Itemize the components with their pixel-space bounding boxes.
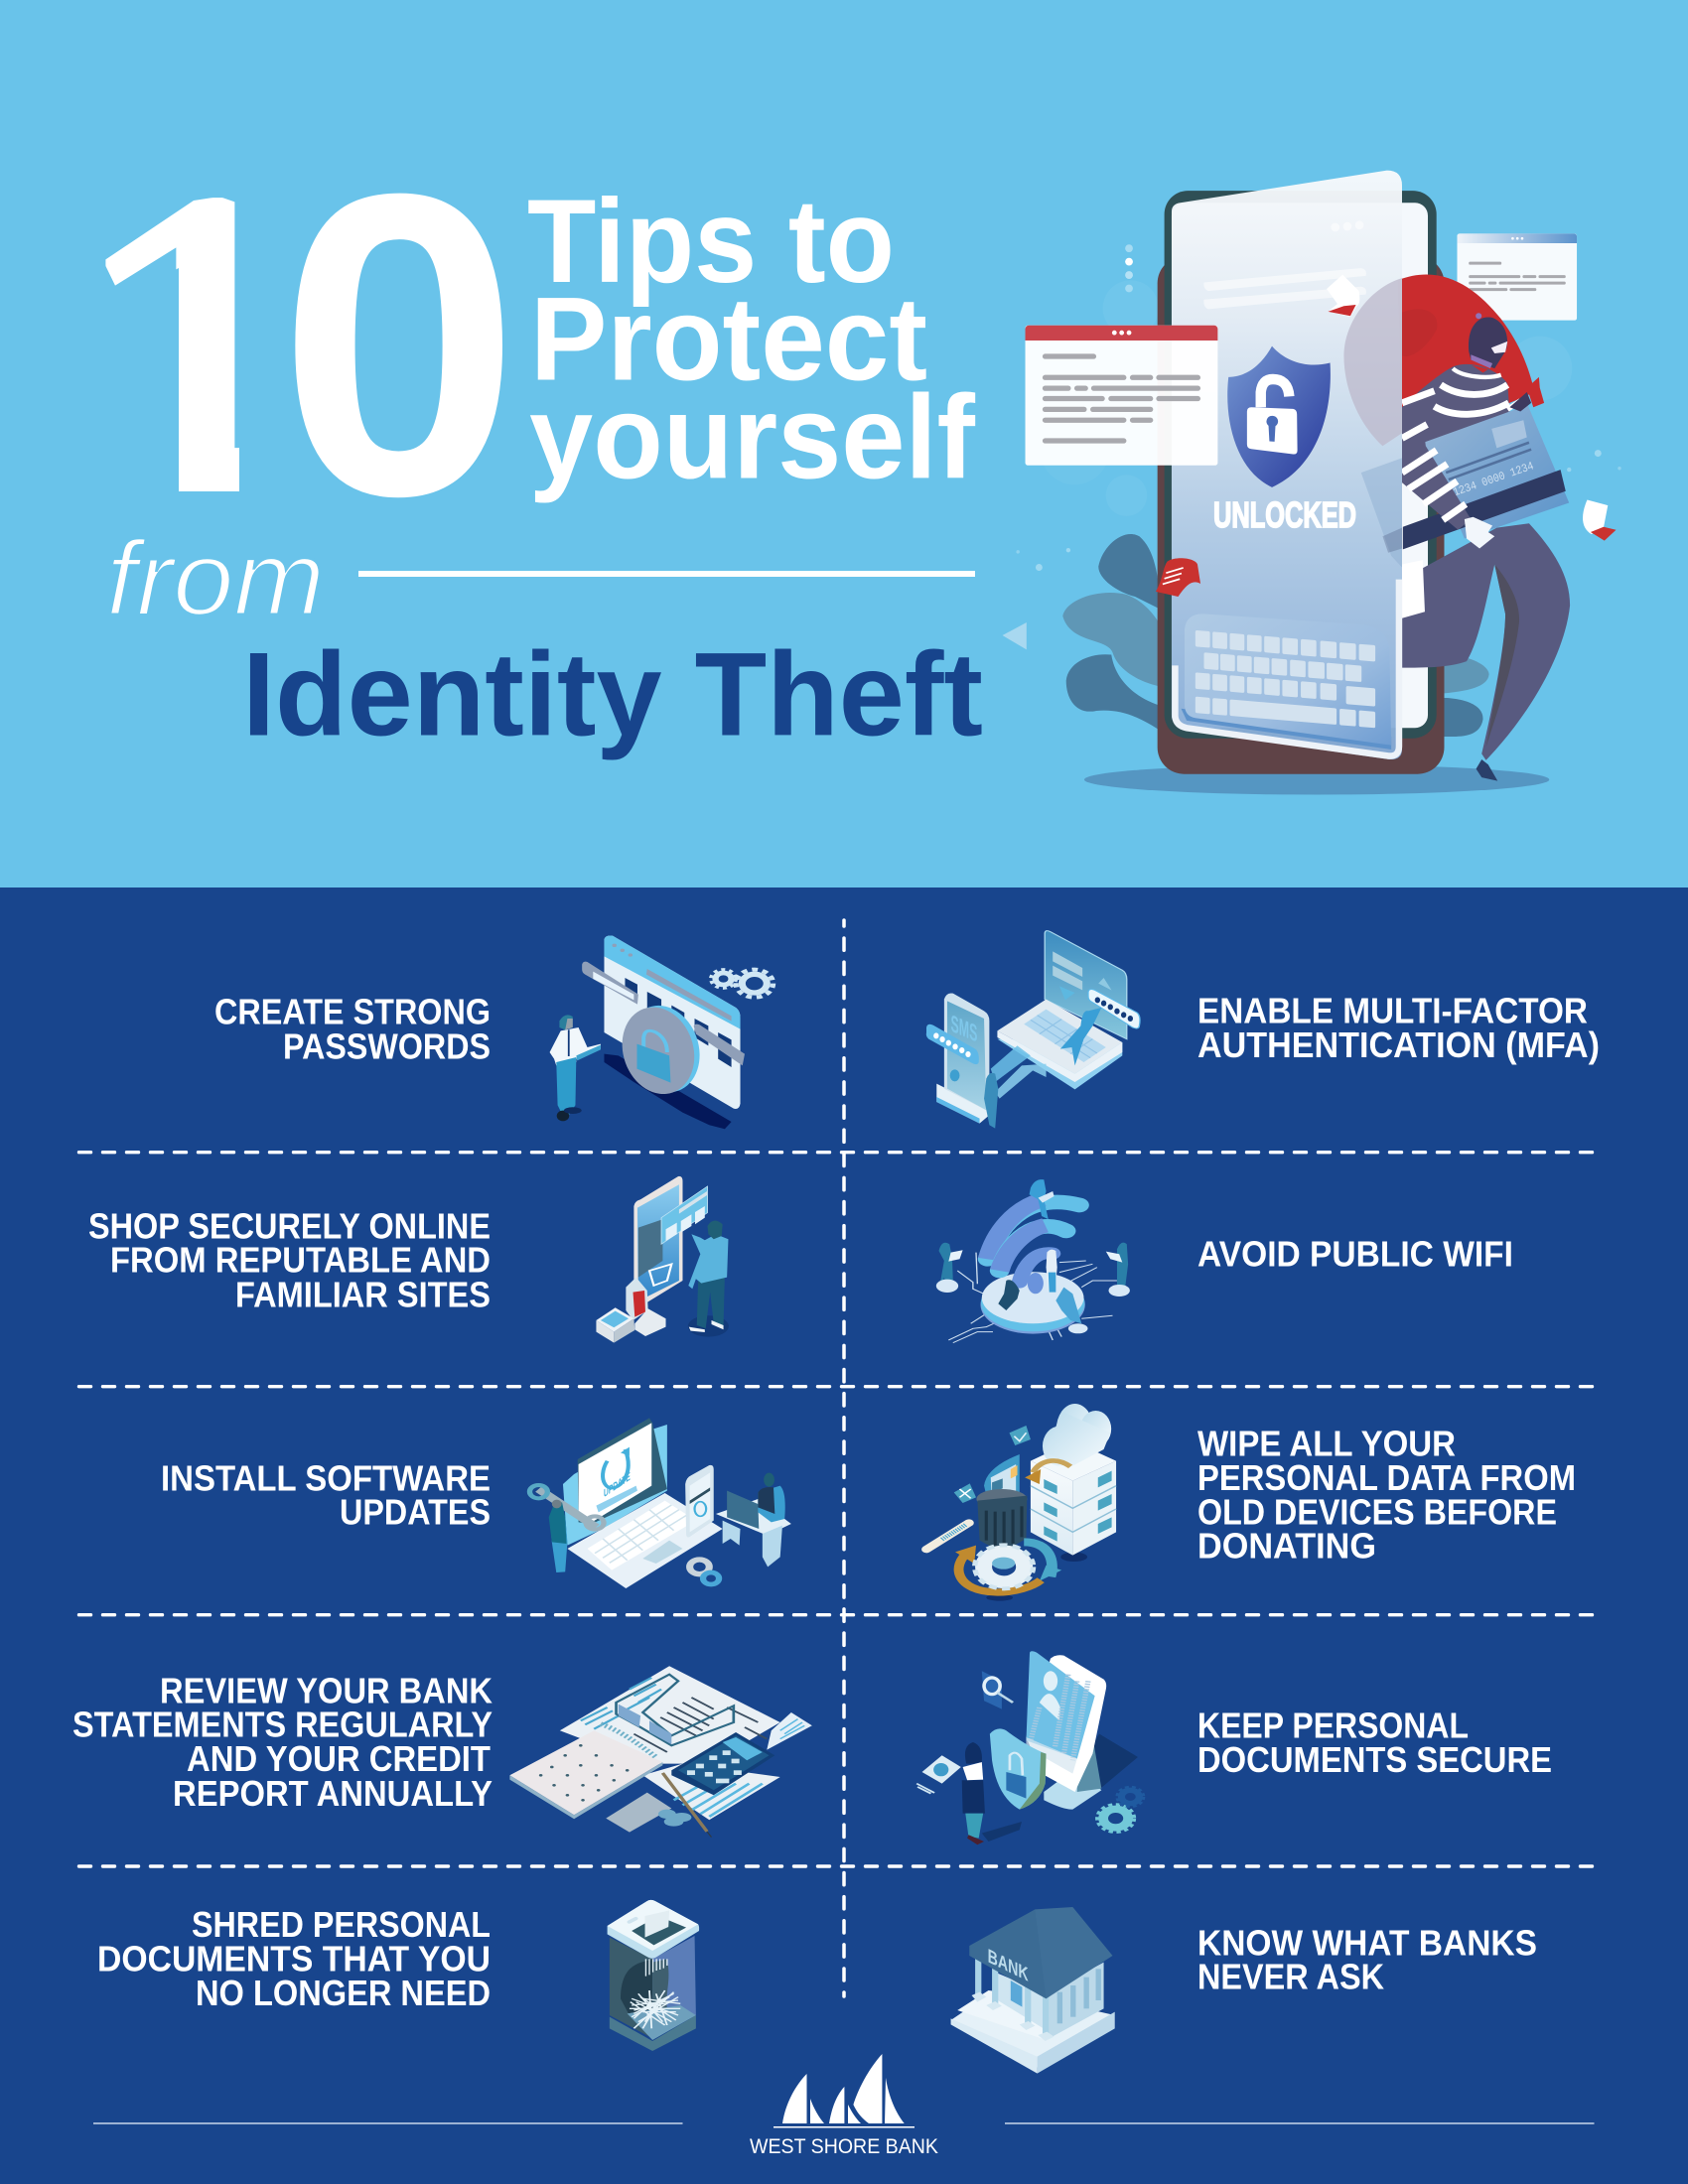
tip 4: avoid public wifi [936, 1179, 1513, 1343]
UNLOCKED label: UNLOCKED [1213, 494, 1356, 535]
tip text: STATEMENTS REGULARLY [72, 1704, 492, 1744]
phone screen corner [1402, 560, 1425, 618]
sack seen through glass [1343, 278, 1402, 446]
thief: hand on sack [1509, 392, 1531, 412]
thief: arm [1402, 399, 1471, 530]
thief: glove [1465, 517, 1494, 548]
tip text [1197, 1706, 1552, 1780]
tip 5: install software updates [161, 1418, 791, 1588]
tip text [88, 1206, 491, 1315]
tip text: CREATE STRONG [214, 992, 491, 1032]
thief: head [1469, 313, 1507, 373]
glass screen panel [1172, 171, 1402, 759]
tip 3: shop securely online [88, 1176, 729, 1343]
footer rules [93, 2122, 1595, 2124]
icon: bank building: BANK [988, 1945, 1029, 1986]
tip text: FROM REPUTABLE AND [110, 1240, 491, 1281]
tip text: REPORT ANNUALLY [173, 1773, 492, 1814]
title line: Protect: Protect [530, 272, 927, 405]
ground shadow [1084, 764, 1549, 795]
header panel: sky blue background [0, 0, 1688, 887]
tip text: ENABLE MULTI-FACTOR [1197, 991, 1588, 1031]
sack tie [1527, 377, 1544, 407]
tip text [1197, 1922, 1537, 1997]
thief: credit card [1403, 405, 1569, 549]
tip text [214, 992, 491, 1067]
leaves [1062, 534, 1489, 737]
thief: credit card: 1234 0000 1234 [1452, 459, 1536, 499]
tip text [1197, 1424, 1576, 1566]
tip text: DOCUMENTS THAT YOU [97, 1939, 491, 1979]
arm stripes [1402, 391, 1466, 520]
dashed dividers [79, 920, 1593, 1996]
tip text: PASSWORDS [283, 1026, 491, 1067]
icon: wifi symbol with people [936, 1179, 1130, 1343]
shield with open padlock [1227, 346, 1331, 487]
tip 8: keep personal documents secure [916, 1651, 1552, 1844]
icon: paper shredder [608, 1900, 699, 2051]
thief: torso [1402, 364, 1509, 451]
torso stripes [1435, 368, 1520, 414]
tip text: WIPE ALL YOUR [1197, 1424, 1456, 1464]
tip 2: enable multi-factor authentication [926, 931, 1600, 1129]
title line: Identity Theft: Identity Theft [242, 627, 983, 760]
icon: laptop update: UPDATE [604, 1470, 631, 1500]
tip text: DONATING [1197, 1525, 1376, 1566]
title rule [358, 571, 975, 577]
icon: laptop and phone SMS code: SMS [951, 1011, 977, 1047]
tip text: PERSONAL DATA FROM [1197, 1457, 1576, 1498]
icon: trash can, cloud and server [926, 1404, 1116, 1601]
tip text: FAMILIAR SITES [235, 1275, 491, 1315]
icon: documents, calendar and calculator [509, 1666, 812, 1838]
tip text: SHOP SECURELY ONLINE [88, 1206, 491, 1247]
tip text [1197, 991, 1600, 1065]
tip text [161, 1458, 491, 1533]
tip text: UPDATES [340, 1492, 491, 1533]
icon: laptop update [529, 1418, 791, 1588]
tip 6: wipe data from old devices [926, 1404, 1576, 1601]
tip text [97, 1904, 491, 2013]
tip 10: know what banks never ask [951, 1907, 1537, 2074]
tip text: NEVER ASK [1197, 1957, 1384, 1997]
faint screen lines [1203, 220, 1366, 309]
logo name: WEST SHORE BANK [750, 2135, 938, 2158]
tip text: OLD DEVICES BEFORE [1197, 1492, 1557, 1533]
title line: Tips to: Tips to [527, 175, 895, 308]
tip 1: create strong passwords [214, 935, 774, 1129]
icon: phone shopping cart [596, 1176, 729, 1343]
tip text: AVOID PUBLIC WIFI [1197, 1234, 1513, 1275]
tip text: KEEP PERSONAL [1197, 1706, 1469, 1746]
small window: top right [1457, 233, 1577, 321]
logo sails [782, 2054, 905, 2123]
phone body [1158, 256, 1444, 774]
tips panel: navy background [0, 887, 1688, 2184]
tip 9: shred personal documents [97, 1900, 699, 2051]
white scrap on screen [1327, 275, 1359, 317]
thief: inner leg [1486, 564, 1519, 748]
tip text: KNOW WHAT BANKS [1197, 1922, 1537, 1963]
flying paper scrap right [1583, 499, 1617, 541]
title numeral 0: 0 [278, 104, 520, 585]
icon: browser padlock [550, 935, 774, 1129]
left window card [1026, 326, 1217, 466]
glass panel light edge [1175, 580, 1399, 756]
tip text: REVIEW YOUR BANK [160, 1671, 492, 1711]
icon: bank building [951, 1907, 1115, 2074]
icon: laptop and phone SMS code [926, 931, 1140, 1129]
logo baseline [774, 2126, 914, 2128]
title word: from: from [106, 520, 325, 637]
title line: yourself: yourself [529, 371, 976, 504]
tip text: AUTHENTICATION (MFA) [1197, 1024, 1600, 1065]
card seen through glass [1361, 458, 1402, 568]
tip text: SHRED PERSONAL [192, 1904, 491, 1945]
tip text: DOCUMENTS SECURE [1197, 1739, 1552, 1780]
thief: money sack [1398, 274, 1535, 425]
title numeral 1: 1 [76, 106, 314, 583]
tip text: INSTALL SOFTWARE [161, 1458, 491, 1499]
tip text: NO LONGER NEED [196, 1973, 491, 2013]
hero illustration: phone with thief [1003, 171, 1621, 795]
bokeh and sparkles [1016, 244, 1621, 571]
triangle [1003, 622, 1027, 649]
tip 7: review statements and credit report [72, 1666, 812, 1838]
logo: West Shore Bank [750, 2054, 938, 2158]
tip text [72, 1671, 492, 1814]
title: 10 Tips to Protect yourself from Identity Theft [105, 193, 981, 760]
thief: shoe [1477, 759, 1497, 781]
icon: phone, shield and woman [916, 1651, 1144, 1844]
keyboard [1182, 614, 1391, 750]
tip text: AND YOUR CREDIT [187, 1738, 491, 1779]
thief: trousers [1402, 523, 1570, 760]
red receipt scrap [1156, 558, 1200, 597]
